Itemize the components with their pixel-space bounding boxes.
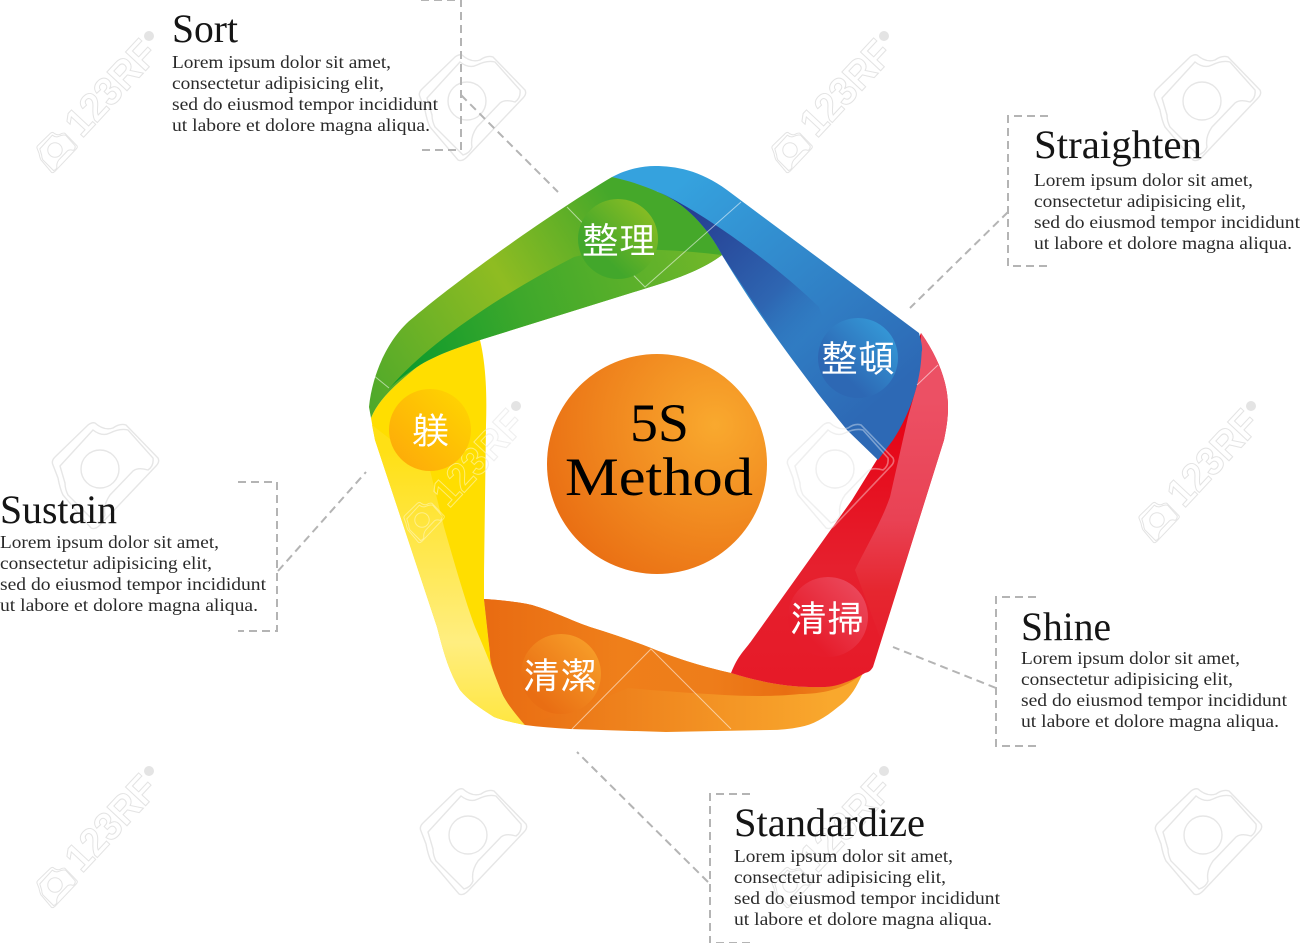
badge: 清潔 xyxy=(521,634,601,714)
badge: 清掃: 清掃 xyxy=(790,599,864,640)
callout: Standardize: consectetur adipisicing elit, xyxy=(734,867,946,887)
watermark: stamps: 123RF xyxy=(791,32,901,145)
callout: Sustain: sed do eiusmod tempor incididunt xyxy=(0,574,266,594)
callout: Straighten: sed do eiusmod tempor incididunt xyxy=(1034,212,1300,232)
callout: Sustain: consectetur adipisicing elit, xyxy=(0,553,212,573)
callout: Standardize: ut labore et dolore magna aliqua. xyxy=(734,909,992,929)
callout: Straighten xyxy=(910,116,1300,308)
callout: Sustain xyxy=(0,472,366,631)
callout: Sustain: Lorem ipsum dolor sit amet, xyxy=(0,532,219,552)
center circle: 5S Method xyxy=(547,354,767,574)
badge: 躾 xyxy=(389,389,471,471)
watermark: stamps: 123RF xyxy=(56,767,166,880)
callout: Shine xyxy=(893,597,1287,746)
callout: Standardize: Standardize xyxy=(734,800,925,845)
center circle: 5S Method: Method xyxy=(565,447,753,507)
band: green (Sort) xyxy=(369,177,722,418)
callout: Straighten: ut labore et dolore magna aliqua. xyxy=(1034,233,1292,253)
callout: Shine: sed do eiusmod tempor incididunt xyxy=(1021,690,1287,710)
badge: 整頓 xyxy=(818,318,898,398)
callout: Straighten: Lorem ipsum dolor sit amet, xyxy=(1034,170,1253,190)
band: blue (Straighten) xyxy=(612,166,922,460)
band: orange (Standardize) xyxy=(484,599,863,732)
center circle: 5S Method: 5S xyxy=(630,393,689,453)
callout: Shine: Shine xyxy=(1021,604,1111,649)
callout: Sustain: Sustain xyxy=(0,487,117,532)
badge: 清掃 xyxy=(788,577,868,657)
watermark lines over bands xyxy=(373,202,938,729)
callout: Sort: ut labore et dolore magna aliqua. xyxy=(172,115,430,135)
badge: 躾: 躾 xyxy=(412,411,449,452)
band: red (Shine) xyxy=(731,333,948,687)
callout: Standardize: sed do eiusmod tempor incididunt xyxy=(734,888,1000,908)
callout: Sort: consectetur adipisicing elit, xyxy=(172,73,384,93)
callout: Standardize: Lorem ipsum dolor sit amet, xyxy=(734,846,953,866)
callout: Standardize xyxy=(577,752,1000,943)
callout: Shine: Lorem ipsum dolor sit amet, xyxy=(1021,648,1240,668)
callout: Sort: Lorem ipsum dolor sit amet, xyxy=(172,52,391,72)
badge: 整理 xyxy=(578,199,658,279)
callout: Sort: Sort xyxy=(172,6,238,51)
badge: 整頓: 整頓 xyxy=(821,339,895,380)
callout: Straighten: consectetur adipisicing elit, xyxy=(1034,191,1246,211)
callout: Sort: sed do eiusmod tempor incididunt xyxy=(172,94,438,114)
badge: 整理: 整理 xyxy=(582,221,656,262)
callout: Shine: ut labore et dolore magna aliqua. xyxy=(1021,711,1279,731)
watermark: stamps: 123RF xyxy=(1158,402,1268,515)
band: yellow (Sustain) xyxy=(371,340,525,725)
badge: 清潔: 清潔 xyxy=(523,656,597,697)
callout: Straighten: Straighten xyxy=(1034,122,1202,167)
callout: Sustain: ut labore et dolore magna aliqua. xyxy=(0,595,258,615)
callout: Shine: consectetur adipisicing elit, xyxy=(1021,669,1233,689)
callout: Sort xyxy=(172,0,558,192)
watermark: stamps: 123RF xyxy=(56,32,166,145)
watermark: stamps: 123RF xyxy=(791,767,901,880)
watermark: stamps: 123RF xyxy=(423,402,533,515)
watermark lines over bands: 123RF xyxy=(423,402,533,515)
